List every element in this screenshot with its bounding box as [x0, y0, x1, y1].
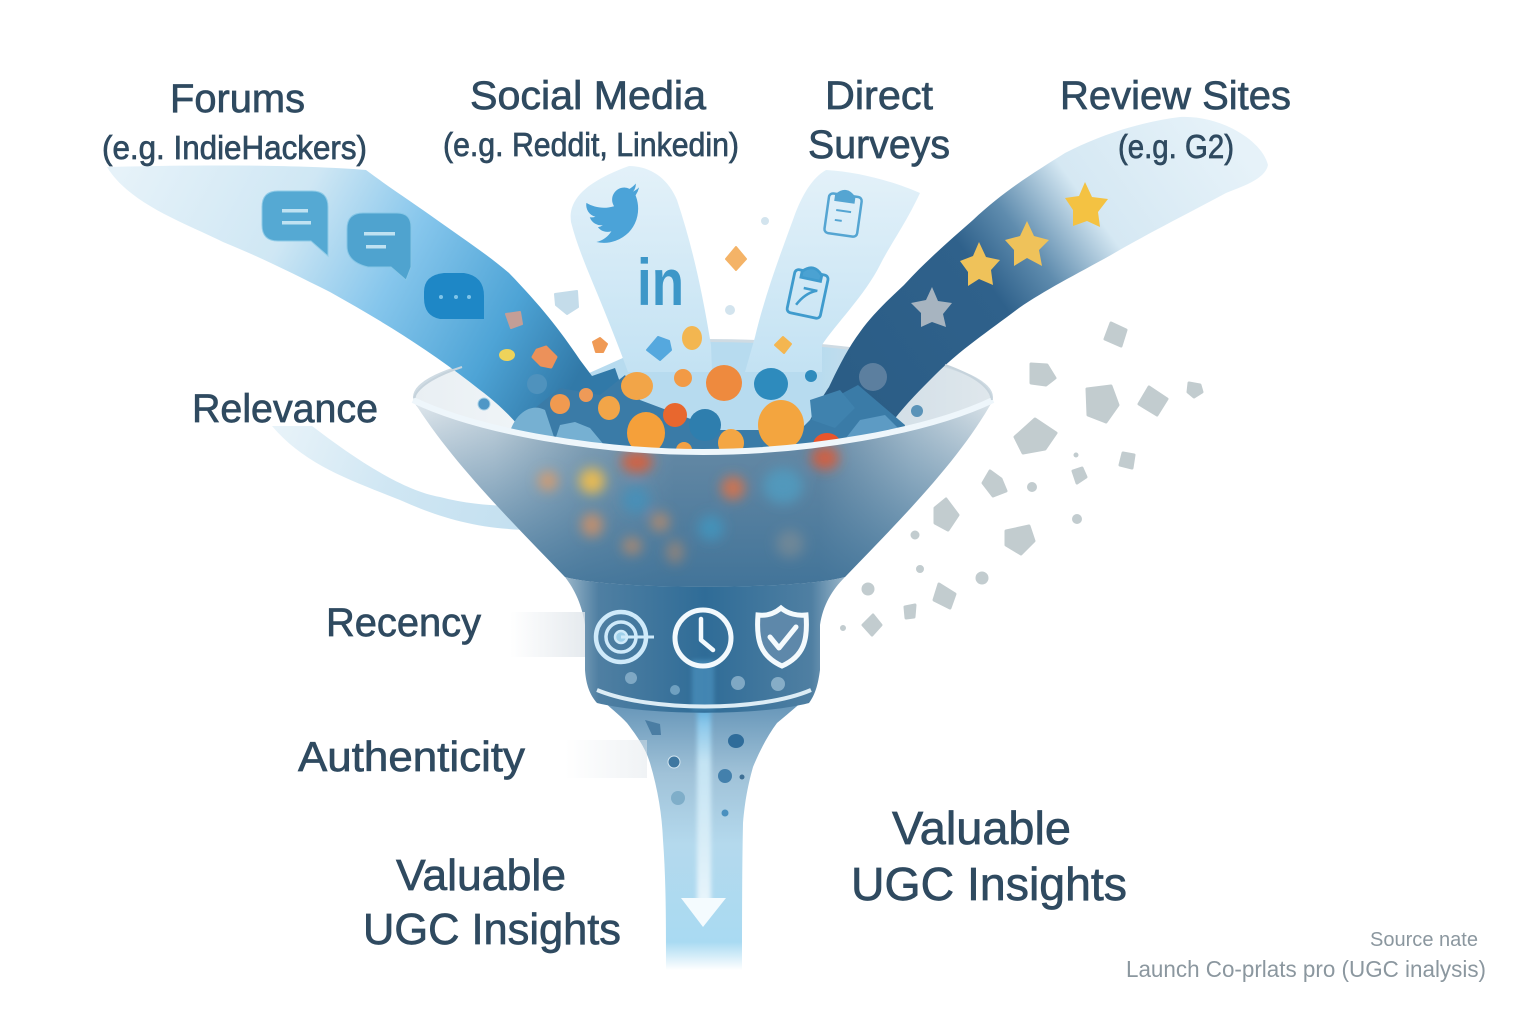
- heading: Review Sites: [1060, 74, 1291, 165]
- heading: Forums: Forums: [170, 77, 305, 121]
- label: Valuable UGC Insights right: [851, 802, 1127, 910]
- icon: target: [596, 612, 654, 662]
- heading: Social Media: [443, 74, 739, 163]
- recency connector shadow: [510, 612, 585, 657]
- icon: twitter bird: [582, 182, 653, 247]
- rim left edge: [414, 367, 462, 398]
- heading: Social Media: (e.g. Reddit, Linkedin): [443, 126, 739, 163]
- label: Authenticity: Authenticity: [298, 733, 525, 780]
- heading: Direct Surveys: Surveys: [808, 123, 950, 167]
- heading: Direct Surveys: [808, 74, 950, 167]
- funnel back wall: [413, 339, 993, 455]
- light particles above funnel: [647, 217, 791, 360]
- white gap right of survey stream: [822, 270, 900, 347]
- heading: Review Sites: (e.g. G2): [1118, 128, 1234, 165]
- heading: Forums: [102, 77, 367, 166]
- label: Valuable UGC Insights left: Valuable: [396, 851, 566, 900]
- funnel neck: [565, 577, 845, 713]
- icon: linkedin: in: [637, 245, 684, 319]
- stream: direct surveys: [745, 170, 920, 372]
- icon: chat bubble 1: [262, 191, 328, 256]
- source note: Launch Co-prlats pro (UGC inalysis): [1126, 956, 1486, 982]
- heading: Direct Surveys: Direct: [825, 74, 933, 118]
- icon: gold star: [1065, 182, 1108, 227]
- relevance swoosh: [272, 426, 535, 530]
- icon: gold star: [960, 242, 1000, 286]
- funnel stem: [590, 688, 816, 970]
- blue dots on rim: [478, 398, 923, 417]
- heading: Forums: (e.g. IndieHackers): [102, 129, 367, 166]
- funnel rim: [413, 400, 993, 452]
- source note: Source nate: [1370, 929, 1478, 951]
- label: Relevance: Relevance: [192, 387, 378, 431]
- stream: social media: [571, 166, 712, 372]
- label: Valuable UGC Insights left: UGC Insights: [363, 905, 621, 954]
- blurred particles inside cone: [538, 446, 839, 564]
- authenticity connector shadow: [565, 740, 647, 778]
- arrowhead: [681, 898, 726, 927]
- icon: chat bubble 3: [424, 273, 484, 319]
- icon: grey star: [911, 287, 952, 327]
- icon: clipboard 2: [786, 265, 830, 319]
- icon: chat bubble 2: [347, 213, 411, 280]
- label: Valuable UGC Insights right: Valuable: [892, 802, 1071, 854]
- funnel cone: [413, 400, 993, 587]
- icon: gold star: [1005, 221, 1049, 266]
- rim right edge: [945, 365, 992, 400]
- white gap between streams: [540, 280, 640, 374]
- icon: shield: [758, 608, 806, 666]
- source note: [1126, 929, 1486, 982]
- icon: clipboard 1: [824, 189, 863, 237]
- neck band: [597, 690, 811, 706]
- label: Valuable UGC Insights left: [363, 851, 621, 954]
- label: Recency: Recency: [326, 601, 481, 645]
- heading: Social Media: Social Media: [470, 74, 707, 118]
- discarded grey particles: [842, 323, 1202, 635]
- stream: review sites: [800, 117, 1268, 440]
- heading: Review Sites: Review Sites: [1060, 74, 1291, 118]
- neck particles: [625, 672, 785, 695]
- stem particles: [645, 720, 744, 816]
- forum particles: [499, 291, 607, 394]
- stream: forums: [107, 165, 640, 440]
- icon: clock: [675, 610, 731, 666]
- funnel contents: [511, 363, 905, 449]
- label: Valuable UGC Insights right: UGC Insights: [851, 858, 1127, 910]
